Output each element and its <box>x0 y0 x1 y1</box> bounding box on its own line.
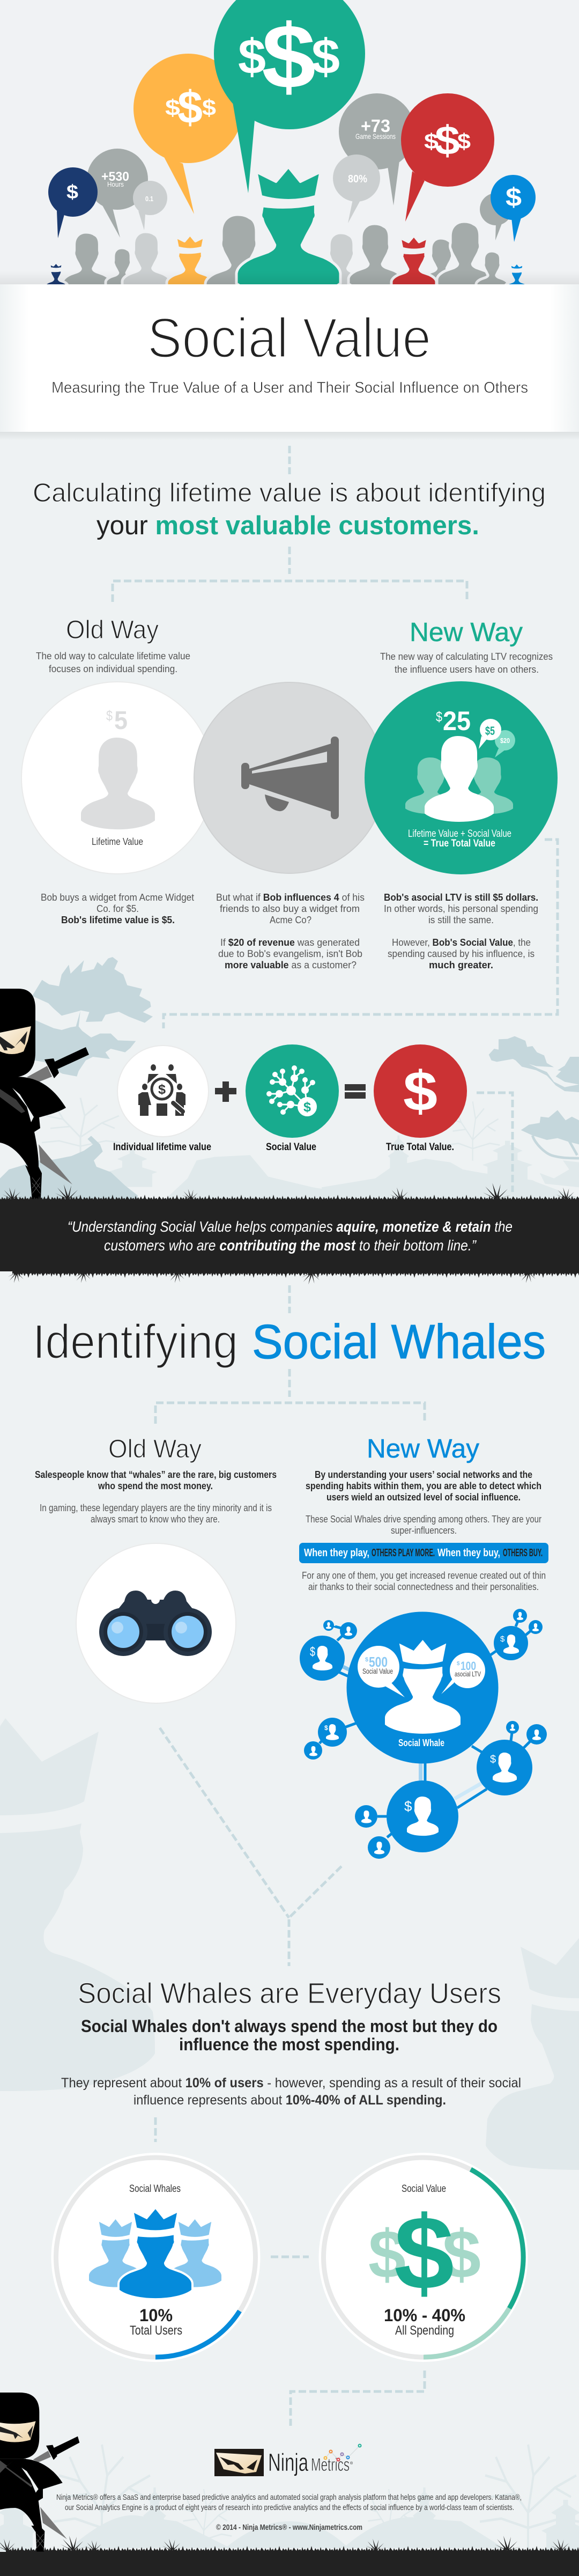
icon: megaphone <box>241 737 339 819</box>
panel: lifetime value circle: 5 <box>114 706 128 735</box>
icon: crowned users <box>89 2207 221 2299</box>
connectors <box>320 1621 531 1837</box>
panel: social whales stat: Total Users <box>130 2323 182 2338</box>
paragraph: column three: is still the same. <box>428 915 494 925</box>
equation: social value: Social Value <box>266 1142 316 1153</box>
whales: old way text: Old Way <box>108 1435 202 1463</box>
bubble: navy dollar: $ <box>66 181 78 203</box>
callout: when they play: When they buy, <box>437 1547 500 1559</box>
title: Social Value <box>147 307 431 370</box>
bubble: $100 asocial ltv: asocial LTV <box>455 1670 481 1678</box>
crowd of user silhouettes <box>44 167 529 298</box>
bubble: $20 <box>495 730 515 757</box>
bubble: $100 asocial ltv: $ <box>457 1661 460 1667</box>
paragraph: column two: But what if Bob influences 4 of his <box>216 892 365 903</box>
paragraph: column three: Bob's asocial LTV is still $5 dollars. <box>384 892 538 903</box>
bubble: yellow dollars: $ <box>202 95 216 120</box>
satellite: middle left: $ <box>324 1724 328 1732</box>
callout: when they play: OTHERS PLAY MORE. <box>372 1547 435 1559</box>
satellite: upper left: $ <box>310 1645 315 1659</box>
paragraph: column two: friends to also buy a widget from <box>220 903 360 914</box>
icon: dollars: $ <box>394 2195 454 2312</box>
bottom grass band <box>0 2536 579 2576</box>
heading: lifetime value: your most valuable customers. <box>96 511 479 540</box>
quote text: “Understanding Social Value helps companies aquire, monetize & retain the <box>68 1218 513 1235</box>
equation: individual lifetime value: Individual lifetime value <box>113 1142 211 1153</box>
bubble: grey +530 hours: +530 <box>101 170 129 184</box>
whales: old way text: In gaming, these legendary players are the tiny minority and it is <box>40 1503 272 1513</box>
social whale network diagram <box>300 1609 547 1859</box>
text: increased revenue: air thanks to their social connectedness and their personalities. <box>308 1581 539 1592</box>
equation: individual lifetime value <box>113 1046 211 1153</box>
bubble: blue dollar: $ <box>506 183 522 212</box>
bubble: blue dollar <box>491 175 536 242</box>
connector dash: to logo <box>291 2371 425 2426</box>
connector dash <box>271 2255 309 2258</box>
background scene: footer <box>0 2445 579 2553</box>
paragraph: column three: In other words, his personal spending <box>384 903 538 914</box>
whales: new way text: users wield an outsized level of social influence. <box>326 1492 521 1503</box>
icon: equals <box>345 1084 366 1099</box>
connector dash: split <box>155 1369 425 1424</box>
icon: network <box>267 1066 316 1116</box>
bubble: teal dollars <box>214 0 365 193</box>
paragraph: share of users and spending: influence represents about 10%-40% of ALL spending. <box>133 2093 446 2108</box>
heading: lifetime value <box>33 479 546 540</box>
heading: lifetime value: Calculating lifetime value is about identifying <box>33 479 546 507</box>
bubble: light grey 0.1: 0.1 <box>145 195 153 203</box>
panel: true total value circle: = True Total Value <box>424 838 495 849</box>
bubble: light grey 80% <box>333 154 380 223</box>
bubble: red dollars: $ <box>424 130 439 153</box>
equation: true total value: $ <box>403 1060 437 1123</box>
bubble: yellow dollars <box>133 54 243 214</box>
whales: old way text: who spend the most money. <box>98 1481 213 1491</box>
bubble: yellow dollars: $ <box>165 95 180 120</box>
callout: when they play: OTHERS BUY. <box>503 1547 543 1559</box>
equation: social value: $ <box>303 1100 311 1115</box>
new way heading and description: the influence users have on others. <box>395 664 539 675</box>
quote band: customers who are contributing the most to their bottom line.” <box>104 1237 477 1254</box>
panel: true total value circle <box>365 681 558 874</box>
paragraph: column three <box>384 892 538 970</box>
ninja character <box>0 989 89 1202</box>
paragraph: column two <box>216 892 365 970</box>
bubble: $500 social value: 500 <box>369 1654 388 1670</box>
satellite: bottom <box>355 1780 458 1859</box>
connector dash <box>288 1285 291 1313</box>
bubble: teal dollars: $ <box>262 6 316 108</box>
bubble: $500 social value: Social Value <box>362 1667 393 1675</box>
bubble: $20: $20 <box>500 737 510 745</box>
callout: when they play <box>299 1543 548 1563</box>
quote band <box>0 1183 579 1284</box>
old way heading and description: The old way to calculate lifetime value <box>36 651 190 661</box>
bubble: $500 social value <box>358 1646 405 1697</box>
panel: megaphone circle <box>194 682 385 873</box>
heading: identifying social whales <box>33 1315 546 1369</box>
satellite: lower right: $ <box>490 1754 496 1765</box>
panel: lifetime value circle: $ <box>106 708 113 724</box>
paragraph: column two: more valuable as a customer? <box>225 960 357 970</box>
icon: plus <box>215 1081 236 1102</box>
paragraph: column one <box>41 892 194 925</box>
whales: new way text: By understanding your users’ social networks and the <box>315 1469 532 1480</box>
connector dash: split to old and new way <box>113 547 467 602</box>
paragraph: column three: spending caused by his influence, is <box>388 948 535 959</box>
bubble: $100 asocial ltv: 100 <box>461 1659 476 1673</box>
whales: old way text: Salespeople know that “whales” are the rare, big customers <box>35 1469 277 1480</box>
satellite: middle left <box>304 1718 347 1760</box>
heading: identifying social whales: Social Whales <box>252 1315 546 1369</box>
paragraph: column three: However, Bob's Social Value, the <box>392 937 531 948</box>
equation: true total value: True Total Value. <box>386 1142 454 1153</box>
satellite: bottom: $ <box>404 1798 412 1814</box>
bubble: red dollars: $ <box>457 130 471 153</box>
bubble: grey +73 sessions: Game Sessions <box>355 132 396 141</box>
bubble: red dollars: $ <box>435 118 460 164</box>
background scene: right <box>322 1036 579 1202</box>
subheading bold: influence the most spending. <box>179 2035 399 2054</box>
panel: true total value circle: Lifetime Value + Social Value <box>408 828 511 840</box>
paragraph: share of users and spending <box>61 2075 521 2108</box>
bubble: yellow dollars: $ <box>177 82 203 133</box>
logo: ninja metrics: ® <box>350 2461 353 2465</box>
panel: binoculars circle <box>76 1543 236 1703</box>
main whale circle <box>346 1611 499 1764</box>
hero illustration: speech bubbles and crowd <box>0 0 579 298</box>
new way heading and description: The new way of calculating LTV recognizes <box>380 651 553 662</box>
satellite: upper left <box>300 1620 357 1681</box>
bubble: $5 <box>479 719 501 749</box>
bubble: small grey <box>480 193 512 240</box>
paragraph: column two: If $20 of revenue was generated <box>220 937 360 948</box>
panel: social value stat: All Spending <box>395 2323 454 2338</box>
bubble: teal dollars: $ <box>238 30 266 84</box>
bubble: $100 asocial ltv <box>441 1653 485 1694</box>
paragraph: column one: Bob buys a widget from Acme Widget <box>41 892 194 903</box>
paragraph: column two: due to Bob's evangelism, isn't Bob <box>218 948 362 959</box>
old way heading and description: Old Way <box>66 616 159 644</box>
background scene: left <box>0 957 358 1203</box>
footer text: © 2014 - Ninja Metrics® - www.Ninjametrics.com <box>216 2523 362 2532</box>
paragraph: column two: Acme Co? <box>270 915 311 925</box>
icon: binoculars <box>99 1591 212 1656</box>
satellite: upper right: $ <box>500 1635 505 1644</box>
text: increased revenue: For any one of them, you get increased revenue created out of thin <box>302 1570 546 1581</box>
equation: social value <box>246 1044 339 1153</box>
panel: social whales stat <box>51 2153 261 2362</box>
text: increased revenue <box>302 1570 546 1592</box>
main whale circle: Social Whale <box>398 1738 444 1748</box>
whales: new way text: New Way <box>367 1434 479 1463</box>
bubble: light grey 80%: 80% <box>348 173 367 185</box>
icon: people with magnifier: $ <box>158 1082 166 1097</box>
background: large crowned silhouettes <box>0 1718 579 2170</box>
bubble: grey +530 hours <box>87 149 148 238</box>
icon: dollars <box>368 2195 481 2312</box>
icon: logo chart line <box>324 2444 361 2461</box>
ninja character: footer <box>0 2393 79 2552</box>
bubble: light grey 0.1 <box>133 181 167 230</box>
paragraph: share of users and spending: They represent about 10% of users - however, spending as a result of their social <box>61 2075 521 2091</box>
satellite: lower right <box>477 1721 547 1795</box>
subheading bold <box>81 2016 498 2054</box>
bubble: $500 social value: $ <box>365 1657 368 1663</box>
paragraph: column three: much greater. <box>429 960 493 970</box>
connector dash <box>154 2117 157 2142</box>
connector dash <box>288 446 291 474</box>
satellite: upper right <box>494 1609 543 1660</box>
heading: everyday users: Social Whales are Everyday Users <box>78 1977 501 2010</box>
panel: social value stat <box>318 2153 528 2362</box>
bubble: red dollars <box>401 93 494 222</box>
icon: dollars: $ <box>442 2216 481 2292</box>
old way heading and description <box>36 616 190 674</box>
bubble: grey +73 sessions <box>339 93 415 205</box>
panel: true total value circle: $ <box>436 709 442 725</box>
connector dash: merge <box>160 1728 342 1966</box>
whales: old way text: always smart to know who they are. <box>91 1514 220 1525</box>
whales: new way text <box>306 1434 541 1536</box>
panel: true total value circle: 25 <box>443 706 471 736</box>
bubble: teal dollars: $ <box>311 30 340 84</box>
heading: identifying social whales: Identifying <box>33 1315 238 1369</box>
subtitle: Measuring the True Value of a User and Their Social Influence on Others <box>51 379 528 396</box>
paragraph: column one: Co. for $5. <box>96 903 139 914</box>
whales: old way text <box>35 1435 277 1525</box>
whales: new way text: spending habits within them, you are able to detect which <box>306 1481 541 1491</box>
old way heading and description: focuses on individual spending. <box>49 664 177 674</box>
bubble: $5: $5 <box>485 724 495 738</box>
panel: lifetime value circle: Lifetime Value <box>92 836 143 847</box>
whales: new way text: super-influencers. <box>391 1525 457 1536</box>
logo: ninja metrics: Metrics <box>311 2455 350 2475</box>
logo: ninja metrics: Ninja <box>268 2448 308 2476</box>
panel: social value stat: Social Value <box>402 2183 446 2195</box>
icon: people with magnifier <box>138 1064 185 1116</box>
footer text <box>56 2493 522 2532</box>
bubble: grey +530 hours: Hours <box>107 180 124 188</box>
new way heading and description <box>380 618 553 675</box>
callout: when they play: When they play, <box>304 1547 369 1559</box>
panel: social whales stat: Social Whales <box>129 2183 181 2195</box>
paragraph: column one: Bob's lifetime value is $5. <box>61 915 175 925</box>
panel: social value stat: 10% - 40% <box>384 2306 465 2325</box>
panel: social whales stat: 10% <box>139 2306 173 2325</box>
subheading bold: Social Whales don't always spend the most but they do <box>81 2016 498 2036</box>
equation: true total value <box>374 1044 467 1153</box>
bubble: grey +73 sessions: +73 <box>361 116 390 136</box>
title band <box>0 284 579 440</box>
connector dash: equation to quote <box>477 1093 513 1192</box>
logo: ninja metrics <box>214 2444 361 2476</box>
bubble: navy dollar <box>48 167 98 238</box>
connector dash: to equation <box>164 840 558 1028</box>
new way heading and description: New Way <box>410 618 523 647</box>
icon: dollars: $ <box>368 2216 406 2292</box>
panel: lifetime value circle <box>21 682 213 874</box>
